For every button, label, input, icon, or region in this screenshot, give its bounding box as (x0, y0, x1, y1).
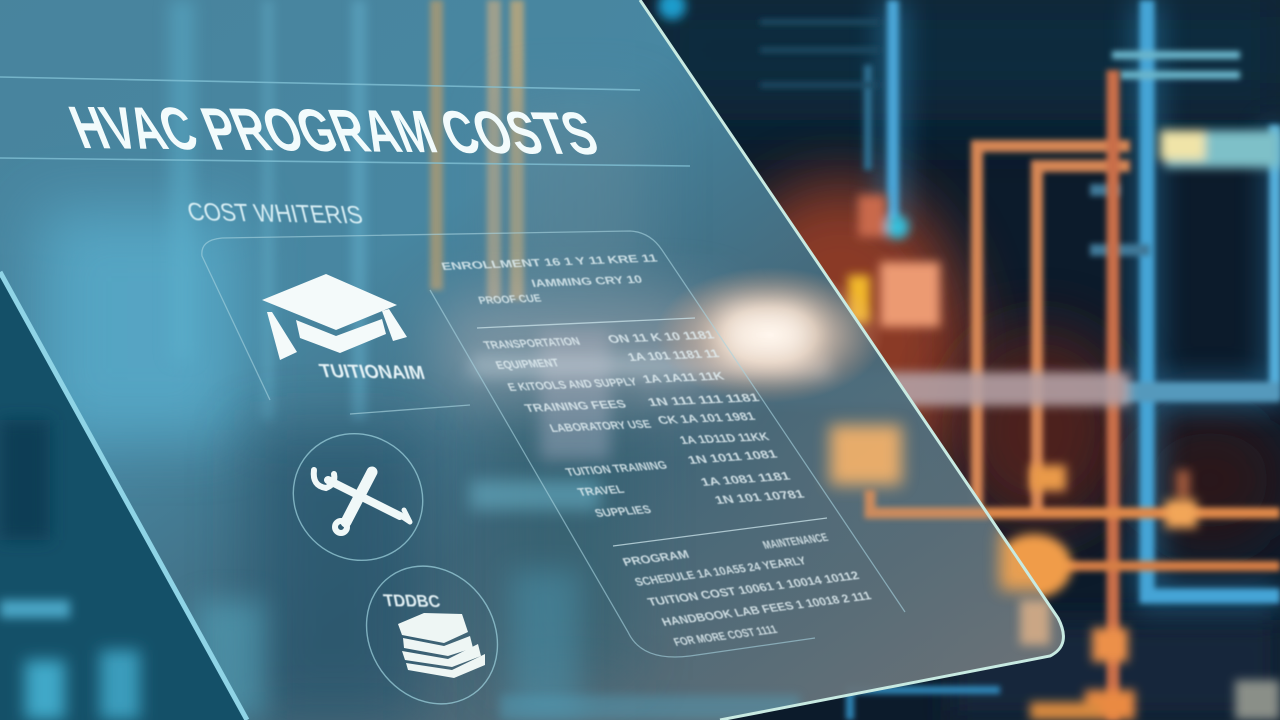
text block: middle rows (482, 330, 807, 520)
orange pipes (872, 70, 1280, 720)
panel: cost card outline (202, 231, 905, 657)
text block: bottom rows: PROGRAM (621, 549, 691, 569)
text block: bottom rows (621, 532, 874, 649)
text block: bottom rows: MAINTENANCE (761, 532, 830, 552)
subtitle: COST WHITERIS (185, 198, 365, 229)
text block: middle rows: E KITOOLS AND SUPPLY (506, 377, 640, 394)
panel edge: left (0, 272, 247, 720)
glass reflections (40, 0, 1060, 720)
text block: bottom rows: TUITION COST 10061 1 10014 10112 (646, 570, 861, 609)
panel edge: right and bottom (640, 0, 1063, 720)
text block: middle rows: ON 11 K 10 1181 (606, 330, 717, 346)
text block: middle rows: SUPPLIES (593, 504, 654, 520)
text block: top row: IAMMING CRY 10 (530, 274, 644, 290)
title: HVAC PROGRAM COSTS (61, 95, 607, 168)
text block: bottom rows: HANDBOOK LAB FEES 1 10018 2 111 (660, 590, 874, 629)
text block: middle rows: 1N 111 111 1181 (646, 392, 762, 409)
horizontal light band (640, 372, 1130, 406)
blue pipe glow (893, 0, 1280, 596)
icon: tools circle (268, 408, 448, 586)
text block: middle rows: 1A 1081 1181 (699, 471, 793, 489)
text block: top row (440, 253, 659, 307)
text block: bottom rows: FOR MORE COST 1111 (672, 624, 780, 649)
text block: top row: ENROLLMENT 16 1 Y 11 KRE 11 (440, 253, 659, 273)
icon: books circle: TDDBC (382, 590, 442, 611)
lens flare (470, 267, 885, 403)
blurred valves and devices (658, 0, 1280, 720)
icon: graduation cap (262, 274, 407, 360)
text block: middle rows: TRANSPORTATION (482, 336, 582, 352)
header rule lines (0, 77, 690, 166)
left lower background (0, 260, 260, 720)
divider above bottom rows (613, 518, 827, 546)
text block: middle rows: EQUIPMENT (494, 358, 561, 372)
text block: middle rows: 1A 1D11D 11KK (678, 431, 772, 447)
text block: middle rows: LABORATORY USE (548, 419, 654, 435)
text block: middle rows: 1N 1011 1081 (686, 449, 780, 467)
text block: middle rows: TRAINING FEES (523, 399, 629, 415)
text block: middle rows: 1A 1A11 11K (641, 371, 727, 386)
icon: books circle (340, 540, 524, 720)
divider under top row (477, 318, 695, 328)
text block: bottom rows: SCHEDULE 1A 10A55 24 YEARLY (633, 555, 809, 589)
blue pipes (760, 0, 1280, 720)
text block: top row: PROOF CUE (477, 293, 543, 307)
label: tuition: TUITIONAIM (317, 360, 427, 384)
text block: middle rows: 1N 101 10781 (713, 489, 807, 507)
text block: middle rows: CK 1A 101 1981 (656, 411, 758, 427)
text block: middle rows: TRAVEL (576, 484, 626, 499)
text block: middle rows: 1A 101 1181 11 (626, 348, 722, 364)
divider under tuition (350, 405, 470, 414)
text block: middle rows: TUITION TRAINING (564, 460, 669, 479)
